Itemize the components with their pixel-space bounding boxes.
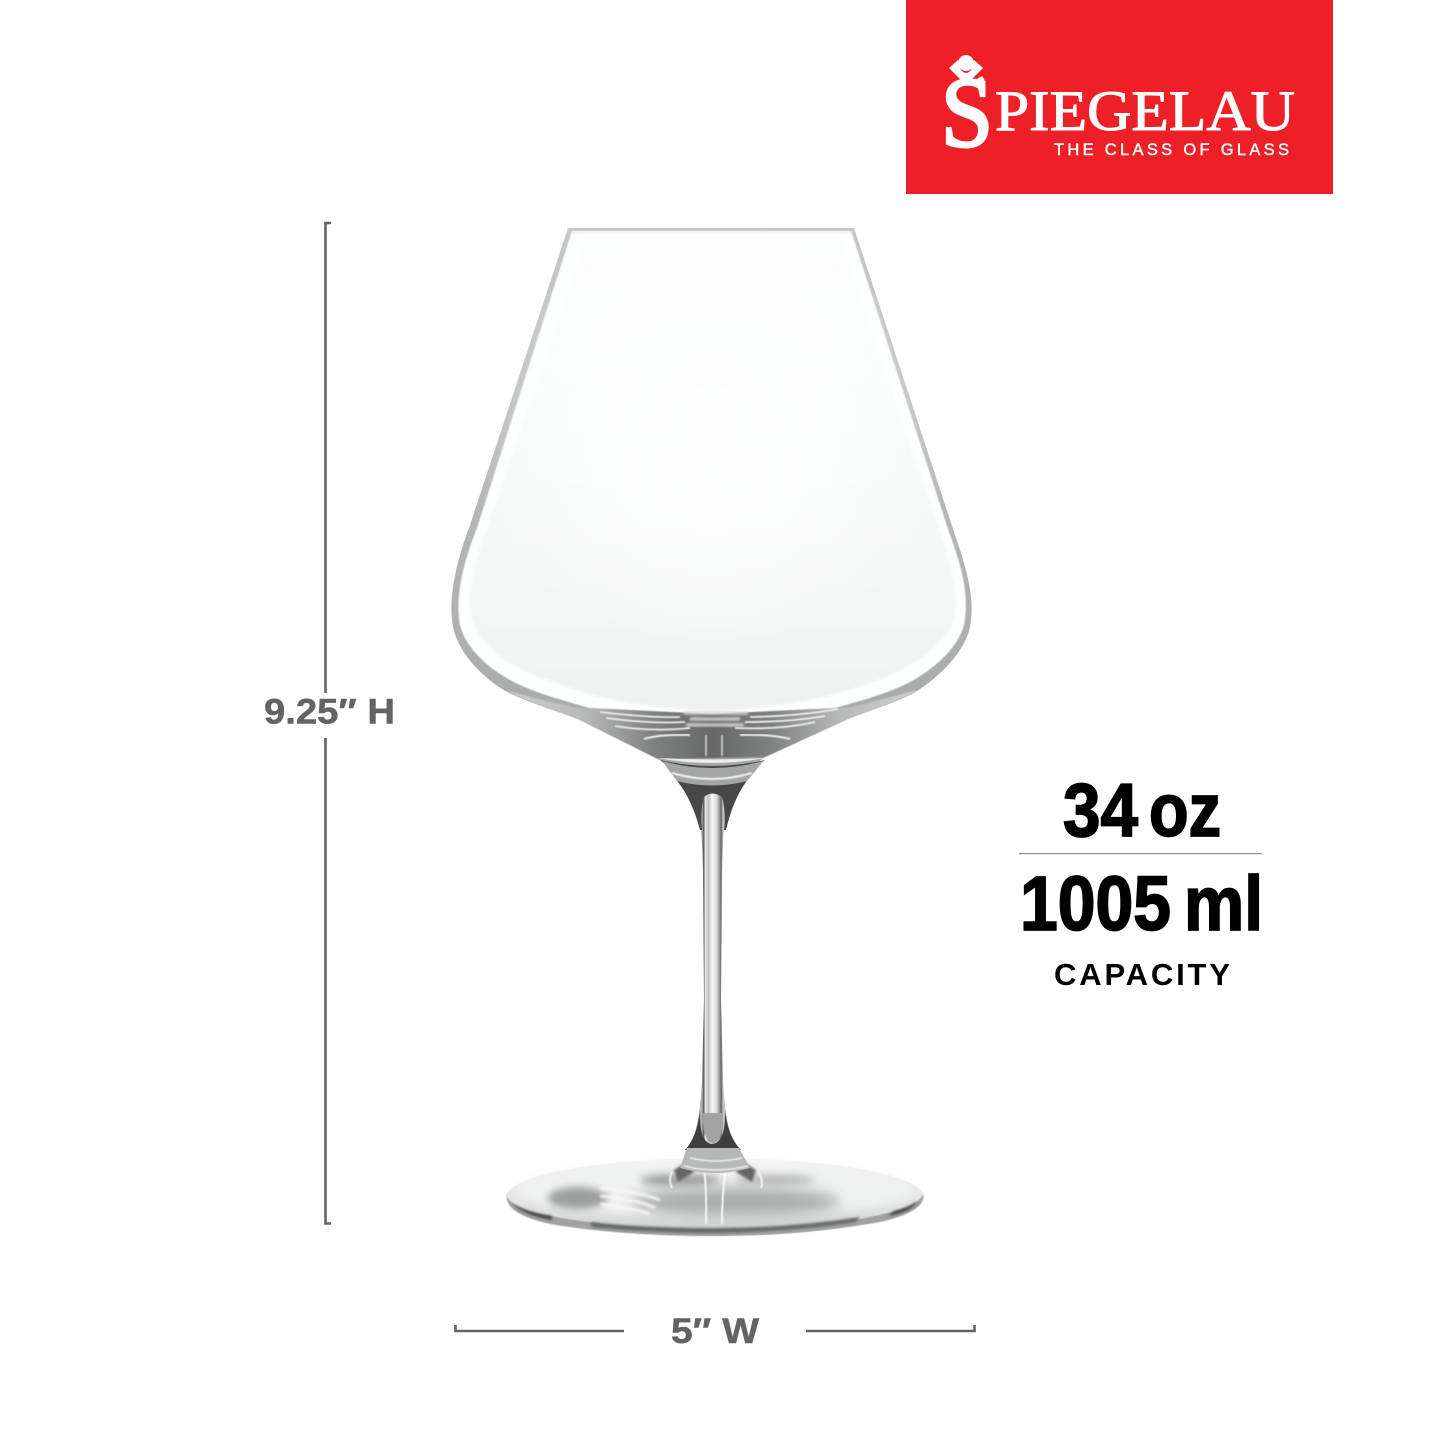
bowl interior bbox=[470, 236, 956, 711]
capacity ounces bbox=[1063, 768, 1221, 852]
capacity block bbox=[1019, 768, 1263, 992]
logo wordmark bbox=[941, 57, 1295, 168]
capacity ounces: 34 bbox=[1063, 768, 1138, 852]
stem flare at base bbox=[685, 1110, 741, 1150]
width bracket line bbox=[456, 1325, 974, 1331]
bowl central glow bbox=[472, 240, 952, 640]
capacity ounces: oz bbox=[1149, 768, 1221, 852]
stem shaft bbox=[686, 790, 740, 1160]
height label: 9.25″ H bbox=[264, 692, 395, 732]
logo tagline: THE CLASS OF GLASS bbox=[1054, 141, 1289, 159]
capacity caption: CAPACITY bbox=[1054, 957, 1230, 992]
bowl lower shading bbox=[505, 690, 918, 759]
logo wordmark: PIEGELAU bbox=[995, 80, 1295, 143]
capacity millilitres: 1005 bbox=[1020, 861, 1171, 947]
logo wordmark: S bbox=[941, 57, 993, 168]
height dimension bbox=[264, 223, 395, 1224]
width dimension bbox=[456, 1312, 974, 1351]
bowl of glass bbox=[451, 228, 972, 785]
stem neck upper bbox=[660, 760, 765, 830]
foot centre reflections bbox=[704, 1165, 726, 1224]
stem of glass bbox=[657, 758, 766, 1173]
logo ornament bbox=[949, 55, 986, 92]
bowl base reflections bbox=[600, 709, 838, 730]
bowl white highlight band bbox=[458, 231, 966, 714]
capacity millilitres: ml bbox=[1184, 861, 1263, 947]
height bracket line bbox=[326, 223, 331, 1224]
capacity divider bbox=[1019, 853, 1262, 854]
width label: 5″ W bbox=[671, 1312, 759, 1351]
rim highlight bbox=[569, 228, 853, 230]
bowl outer edge bbox=[451, 228, 972, 785]
logo panel: Spiegelau bbox=[906, 0, 1333, 194]
wine glass photo illustration bbox=[451, 228, 972, 1236]
foot rim shadows bbox=[507, 1194, 923, 1236]
foot of glass bbox=[506, 1158, 924, 1236]
